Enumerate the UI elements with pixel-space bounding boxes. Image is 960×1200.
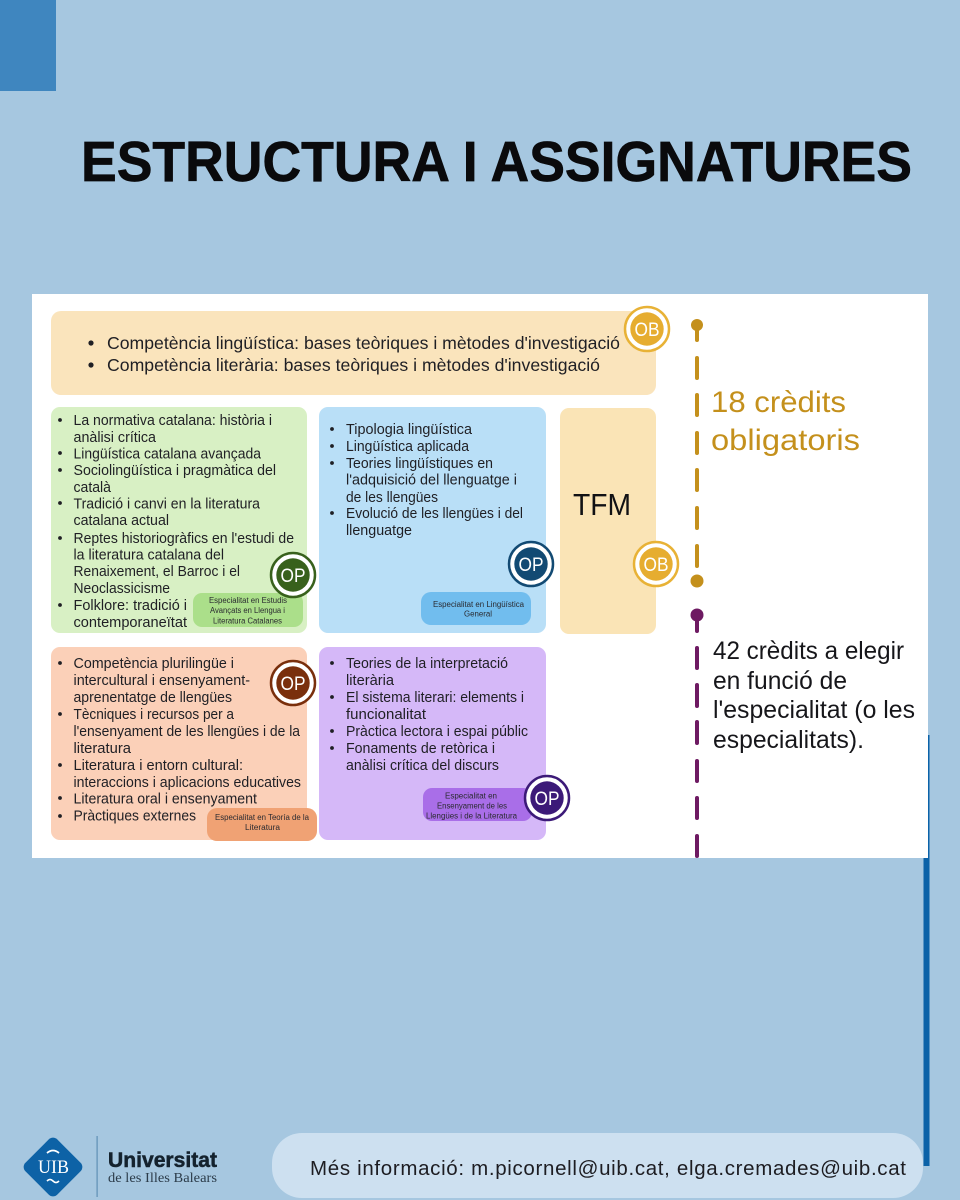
panel: Estudis Avançats: Lingüística catalana avançada [74,446,262,462]
logo: UIB: de les Illes Balears [108,1171,217,1186]
chip: Especialitat Teoria de la Literatura: Especialitat en Teoría de la [215,813,310,822]
chip: Especialitat Lingüística General: Especialitat en Lingüística [433,600,525,609]
panel: Teoria de la Literatura courses: interaccions i aplicacions educatives [74,775,301,791]
panel: compulsory competences: Competència lingüística: bases teòriques i mètodes d'investigació [107,333,620,353]
panel: Lingüística General: Tipologia lingüística [346,422,473,438]
panel: Estudis Avançats: Folklore: tradició i [74,598,187,614]
panel: Estudis Avançats: Neoclassicisme [74,581,170,597]
badge: OB TFM: OB [644,555,668,576]
timeline: elective credits [690,608,704,856]
chip: Especialitat Lingüística General: General [464,610,492,618]
panel: Teoria de la Literatura courses: intercultural i ensenyament- [74,673,250,689]
panel: structure diagram [32,294,928,858]
text: 18 credits: obligatoris [711,424,860,457]
panel: Teoria de la Literatura courses: Literatura i entorn cultural: [74,758,243,774]
panel: TFM [560,408,656,634]
panel: Ensenyament courses: Pràctica lectora i espai públic [346,724,528,740]
panel: Teoria de la Literatura courses [51,647,307,840]
badge: OB top [625,307,669,351]
panel: compulsory competences: Competència literària: bases teòriques i mètodes d'investigació [107,355,600,375]
badge: OP purple [525,776,569,820]
badge: OB top: OB [634,320,660,341]
right blue accent line [924,735,930,1166]
panel: Estudis Avançats: Tradició i canvi en la literatura [74,496,261,512]
badge: OP brown [271,661,315,705]
text: 42 credits: l'especialitat (o les [713,696,915,724]
logo: UIB: Universitat [108,1149,217,1172]
chip: Especialitat Lingüística General [421,592,531,625]
panel: Estudis Avançats: contemporaneïtat [74,615,187,631]
panel: Lingüística General: llenguatge [346,523,412,539]
corner accent block [0,0,56,91]
panel: Lingüística General: Teories lingüístiques en [346,456,493,472]
badge: OP blue [509,542,553,586]
panel: Lingüística General: Lingüística aplicada [346,439,470,455]
panel: Ensenyament courses: literària [346,673,395,689]
panel: Lingüística General: Evolució de les llengües i del [346,506,523,522]
panel: Teoria de la Literatura courses: l'ensenyament de les llengües i de la [74,724,301,740]
badge: OP green: OP [280,566,306,587]
logo: UIB: UIB [38,1157,69,1178]
contact pill: Més informació: m.picornell@uib.cat, elga.cremades@uib.cat [310,1157,906,1180]
chip: Especialitat Ensenyament: Especialitat en [445,792,497,800]
panel: Teoria de la Literatura courses: Pràctiques externes [74,808,196,824]
text: 18 credits: 18 crèdits [711,386,846,419]
contact pill [272,1133,923,1198]
chip: Especialitat Estudis Avançats: Literatura Catalanes [213,616,282,626]
panel: Lingüística General: de les llengües [346,490,438,506]
panel: Teoria de la Literatura courses: Tècniques i recursos per a [74,707,235,723]
badge: OP brown: OP [280,674,306,695]
badge: OP green [271,553,315,597]
chip: Especialitat Teoria de la Literatura [207,808,317,841]
panel: Teoria de la Literatura courses: Literatura oral i ensenyament [74,792,257,808]
text: 42 credits [713,637,915,754]
panel: Teoria de la Literatura courses: literatura [74,741,132,757]
panel: Ensenyament courses: Teories de la interpretació [346,656,508,672]
panel: Estudis Avançats: La normativa catalana: història i [74,413,272,429]
chip: Especialitat Ensenyament: Llengües i de la Literatura [426,812,518,820]
chip: Especialitat Ensenyament: Ensenyament de les [437,802,507,810]
panel: Estudis Avançats: Sociolingüística i pragmàtica del [74,463,276,479]
panel: Estudis Avançats: catalana actual [74,513,169,529]
panel: TFM: TFM [573,487,631,522]
chip: Especialitat Estudis Avançats [193,593,303,627]
title: ESTRUCTURA I ASSIGNATURES [81,130,912,194]
panel: Teoria de la Literatura courses: aprenentatge de llengües [74,690,232,706]
text: 42 credits: 42 crèdits a elegir [713,637,904,665]
panel: Estudis Avançats: la literatura catalana del [74,548,224,564]
text: 42 credits: especialitats). [713,726,864,754]
chip: Especialitat Ensenyament [423,788,532,821]
chip: Especialitat Estudis Avançats: Especialitat en Estudis [209,596,287,605]
panel: Lingüística General [319,407,546,633]
panel: Estudis Avançats: Renaixement, el Barroc i el [74,564,240,580]
badge: OB TFM [634,542,678,586]
logo: UIB [21,1135,217,1199]
badge: OP blue: OP [518,555,544,576]
panel: Teoria de la Literatura courses: Competència plurilingüe i [74,656,234,672]
timeline: compulsory credits [690,319,704,588]
chip: Especialitat Estudis Avançats: Avançats en Llengua i [210,606,285,615]
panel: Estudis Avançats: català [74,480,112,496]
panel: Estudis Avançats: Reptes historiogràfics en l'estudi de [74,531,294,547]
panel: Ensenyament courses: funcionalitat [346,707,426,723]
panel: Estudis Avançats: anàlisi crítica [74,430,157,446]
text: 42 credits: en funció de [713,667,847,695]
panel: Ensenyament courses [319,647,546,840]
panel: compulsory competences [51,311,656,395]
panel: Ensenyament courses: Fonaments de retòrica i [346,741,495,757]
panel: Lingüística General: l'adquisició del llenguatge i [346,472,517,488]
text: 18 credits [711,386,860,457]
panel: Estudis Avançats [51,407,307,633]
panel: Ensenyament courses: anàlisi crítica del discurs [346,758,499,774]
panel: Ensenyament courses: El sistema literari: elements i [346,690,524,706]
chip: Especialitat Teoria de la Literatura: Literatura [245,823,281,832]
badge: OP purple: OP [534,789,560,810]
